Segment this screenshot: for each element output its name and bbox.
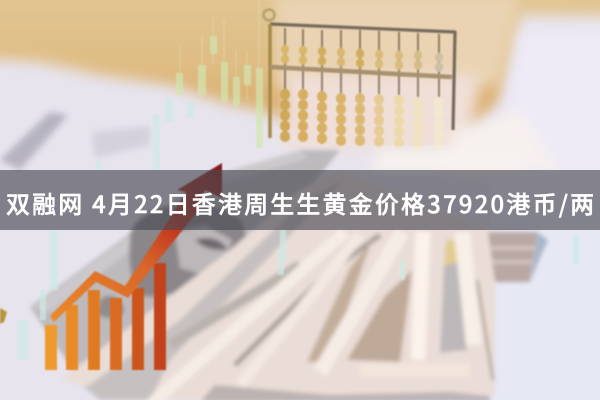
trend arrow <box>50 163 222 322</box>
lavender paper top right <box>440 30 600 200</box>
abacus <box>264 10 455 149</box>
soft shadows on paper <box>0 112 150 170</box>
abacus upper beads <box>285 49 439 75</box>
light haze below abacus <box>370 150 520 172</box>
cream wall behind abacus <box>275 0 520 150</box>
banknote: bottom shadow edges <box>200 385 490 400</box>
abacus rods <box>285 28 439 140</box>
US banknotes stack <box>30 150 548 400</box>
banknote: small stack at right <box>488 232 537 282</box>
right side cool paper <box>490 180 600 400</box>
rising bar chart with arrow <box>45 163 222 370</box>
abacus lower beads <box>285 94 439 149</box>
title bar <box>0 170 600 230</box>
banknote: white highlight strips <box>150 232 474 400</box>
banknote: main portrait note <box>30 150 340 388</box>
bars <box>45 263 166 370</box>
title: 双融网 4月22日香港周生生黄金价格37920港币/两 <box>6 185 596 220</box>
abacus frame <box>264 10 455 138</box>
banknote: fanned notes base <box>60 170 495 400</box>
banknote: taupe panels <box>307 240 372 362</box>
gold ornament at left edge <box>0 308 7 324</box>
gold wall background <box>0 0 600 130</box>
banknote: grey valleys between fanned notes <box>170 235 380 365</box>
